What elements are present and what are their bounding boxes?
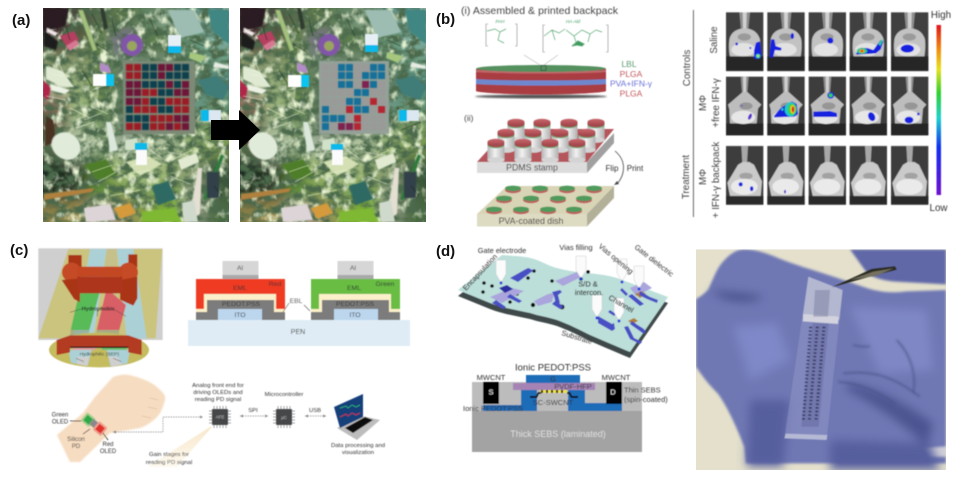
illustration: wrist with sensor: Red — [102, 442, 114, 448]
disc layer labels: PVA+IFN-γ — [610, 78, 653, 88]
illustration: wrist with sensor: Silicon — [67, 437, 85, 443]
illustration: PDMS stamp: PDMS stamp — [506, 162, 558, 172]
illustration: layered disc — [475, 65, 607, 98]
photo: display after stimulus — [217, 0, 447, 241]
process step labels — [461, 242, 676, 346]
diagram: transistor cross-section: D — [610, 388, 616, 396]
group labels: Controls — [682, 50, 693, 86]
process step labels: Vias opening — [597, 242, 635, 276]
diagram: OLED stack cross-sections: PEDOT:PSS — [222, 301, 261, 308]
diagram: transistor cross-section: G — [550, 374, 556, 384]
arrow: before to after — [211, 110, 260, 150]
arrow: flip and print: Print — [627, 164, 644, 173]
illustration: wrist with sensor: OLED — [100, 449, 117, 455]
illustration: printing head over substrate: Hydrophilic (SEP) — [80, 352, 119, 358]
arrow: flip and print — [606, 151, 644, 185]
diagram: OLED stack cross-sections: ITO — [234, 312, 246, 319]
signal path: front end, microcontroller, laptop: reading PD signal — [146, 460, 192, 466]
illustration: PVA-coated dish — [477, 186, 614, 226]
signal path: front end, microcontroller, laptop: SPI — [248, 408, 258, 414]
chemical structures: PAH and HA-Ald: PAH — [496, 19, 505, 24]
process step labels: Channel — [607, 293, 636, 315]
diagram: OLED stack cross-sections: Green — [376, 281, 395, 288]
group labels: +free IFN-γ — [711, 78, 722, 128]
diagram: OLED stack cross-sections: PEN — [291, 329, 305, 336]
signal path: front end, microcontroller, laptop: reading PD signal — [195, 397, 241, 403]
process step labels: intercon. — [575, 288, 603, 297]
group labels — [681, 10, 722, 218]
diagram: OLED stack cross-sections: PEDOT:PSS — [336, 301, 375, 308]
diagram: OLED stack cross-sections: EBL — [290, 298, 303, 305]
signal path: front end, microcontroller, laptop — [113, 383, 385, 467]
label: (ii): (ii) — [464, 113, 474, 123]
process step labels: Gate electrode — [478, 246, 526, 255]
mouse images — [726, 12, 928, 205]
panel (b): backpack assembly and printing — [436, 5, 653, 226]
illustration: printing process on curved substrate — [458, 255, 668, 358]
diagram: transistor cross-section: Ionic PEDOT:PSS — [463, 404, 523, 413]
illustration: PVA-coated dish: PVA-coated dish — [499, 216, 564, 226]
process step labels: Gate dielectric — [633, 242, 676, 279]
colour scale — [930, 10, 951, 214]
disc layer labels: LBL — [621, 59, 637, 69]
process step labels: S/D & — [578, 280, 598, 288]
illustration: printing head over substrate: Hydrophobic — [82, 306, 115, 312]
signal path: front end, microcontroller, laptop: AFE — [216, 414, 224, 420]
illustration: PDMS stamp — [477, 119, 614, 173]
signal path: front end, microcontroller, laptop: Gain stages for — [149, 452, 189, 458]
group labels: + IFN-γ backpack — [711, 142, 722, 218]
signal path: front end, microcontroller, laptop: USB — [309, 408, 321, 414]
signal path: front end, microcontroller, laptop: Data processing and — [331, 443, 385, 449]
process step labels: Substrate — [560, 328, 593, 346]
panel (b): bioluminescence imaging grid — [681, 10, 951, 218]
diagram: OLED stack cross-sections: ITO — [349, 312, 361, 319]
signal path: front end, microcontroller, laptop: driving OLEDs and — [193, 390, 243, 396]
disc layer labels: PLGA — [620, 88, 643, 98]
diagram: OLED stack cross-sections: Al — [237, 265, 244, 272]
signal path: front end, microcontroller, laptop: Analog front end for — [192, 383, 244, 389]
label: (a): (a) — [12, 12, 30, 29]
colour scale: Low — [930, 203, 948, 214]
signal path: front end, microcontroller, laptop: visualization — [342, 450, 374, 456]
panel (c): printed OLED pulse oximeter — [10, 242, 410, 467]
label: (b): (b) — [436, 11, 455, 28]
diagram: transistor cross-section: Thin SEBS — [624, 386, 661, 394]
disc layer labels: PLGA — [620, 69, 643, 79]
group labels: Saline — [709, 26, 720, 54]
diagram: OLED stack cross-sections: Al — [350, 265, 357, 272]
process step labels: Encapsulation — [461, 252, 499, 292]
group labels: MΦ — [698, 169, 709, 185]
disc layer labels — [610, 59, 653, 98]
arrow: flip and print: Flip — [606, 164, 619, 173]
group labels: MΦ — [698, 95, 709, 111]
colour scale: High — [931, 10, 951, 21]
chemical structures: PAH and HA-Ald: HA-Ald — [566, 19, 581, 24]
signal path: front end, microcontroller, laptop: Microcontroller — [265, 392, 303, 398]
process step labels: Vias filling — [559, 243, 593, 252]
signal path: front end, microcontroller, laptop: μC — [281, 415, 288, 420]
group labels: Treatment — [681, 155, 692, 199]
illustration: wrist with sensor — [52, 375, 165, 462]
panel (a): colour-changing display in foliage — [12, 0, 447, 241]
diagram: transistor cross-section: (spin-coated) — [624, 395, 668, 404]
diagram: transistor cross-section: S — [488, 388, 494, 396]
diagram: OLED stack cross-sections: EML — [347, 285, 361, 292]
illustration: printing head over substrate — [38, 248, 163, 367]
diagram: transistor cross-section: Thick SEBS (laminated) — [510, 429, 606, 439]
diagram: transistor cross-section: MWCNT — [602, 373, 631, 382]
diagram: OLED stack cross-sections — [188, 261, 410, 346]
diagram: transistor cross-section: SC-SWCNT — [533, 398, 574, 407]
diagram: transistor cross-section: MWCNT — [477, 373, 506, 382]
diagram: transistor cross-section: Ionic PEDOT:PSS — [515, 362, 591, 374]
heading: (i) assembled and printed backpack: (i) Assembled & printed backpack — [461, 5, 619, 17]
diagram: OLED stack cross-sections: Red — [269, 281, 281, 288]
diagram: OLED stack cross-sections: EML — [233, 285, 247, 292]
illustration: wrist with sensor: Green — [52, 412, 68, 418]
photo: display before stimulus — [20, 0, 250, 241]
diagram: transistor cross-section — [463, 362, 668, 452]
panel (d): stretchable transistor array — [436, 242, 946, 470]
chemical structures: PAH and HA-Ald — [486, 19, 608, 65]
illustration: wrist with sensor: OLED — [52, 420, 69, 426]
illustration: wrist with sensor: PD — [72, 444, 81, 450]
label: (d): (d) — [436, 243, 455, 260]
photo: printed device on gloved hand — [696, 249, 946, 470]
diagram: transistor cross-section: PVDF-HFP — [554, 382, 592, 391]
label: (c): (c) — [10, 242, 28, 259]
